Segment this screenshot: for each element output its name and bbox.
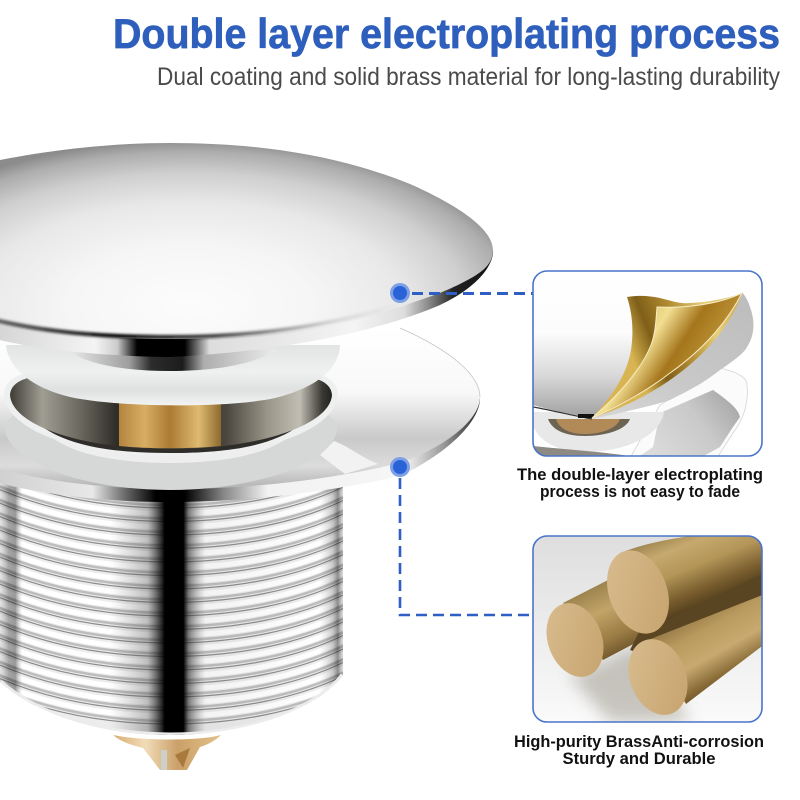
marker: flange xyxy=(390,457,410,477)
left rod xyxy=(546,580,639,677)
lower disc xyxy=(630,368,747,458)
bottom rod xyxy=(628,596,762,715)
dark gap between rods xyxy=(630,574,762,651)
caption: electroplating: The double-layer electroplating xyxy=(517,465,763,484)
connector: cap to panel 1 xyxy=(412,292,533,295)
brass tip xyxy=(113,735,221,770)
panel: brass rods xyxy=(533,535,770,723)
caption: electroplating: process is not easy to fade xyxy=(540,482,740,501)
dome lower shadow xyxy=(0,305,400,337)
threaded body xyxy=(0,483,343,735)
connector: flange to panel 2 xyxy=(400,478,533,615)
lower flange xyxy=(0,328,480,502)
peeled gold layer xyxy=(592,293,742,418)
caption: brass: Sturdy and Durable xyxy=(562,749,716,768)
top cap rim xyxy=(0,250,493,357)
dark line under dome xyxy=(533,407,592,419)
gold fold xyxy=(592,293,742,418)
top rod xyxy=(607,536,762,634)
inner seat ring xyxy=(40,425,300,463)
plug stem xyxy=(66,350,278,371)
upper frosted ring xyxy=(6,345,340,405)
brass core xyxy=(119,402,221,448)
panel: electroplating detail xyxy=(533,271,762,458)
collar and recess xyxy=(4,366,338,456)
chrome dome xyxy=(534,292,742,416)
caption: brass: High-purity BrassAnti-corrosion xyxy=(514,732,764,751)
rod shadows xyxy=(570,645,690,722)
frost ring and recess xyxy=(533,412,664,452)
marker: cap xyxy=(390,283,410,303)
caption: brass xyxy=(514,732,764,768)
product: chrome pop-up drain plug xyxy=(0,143,493,770)
caption: electroplating xyxy=(517,465,763,501)
top cap dome xyxy=(0,143,493,339)
silver base metal xyxy=(574,292,754,419)
lower frosted ring xyxy=(5,400,337,490)
